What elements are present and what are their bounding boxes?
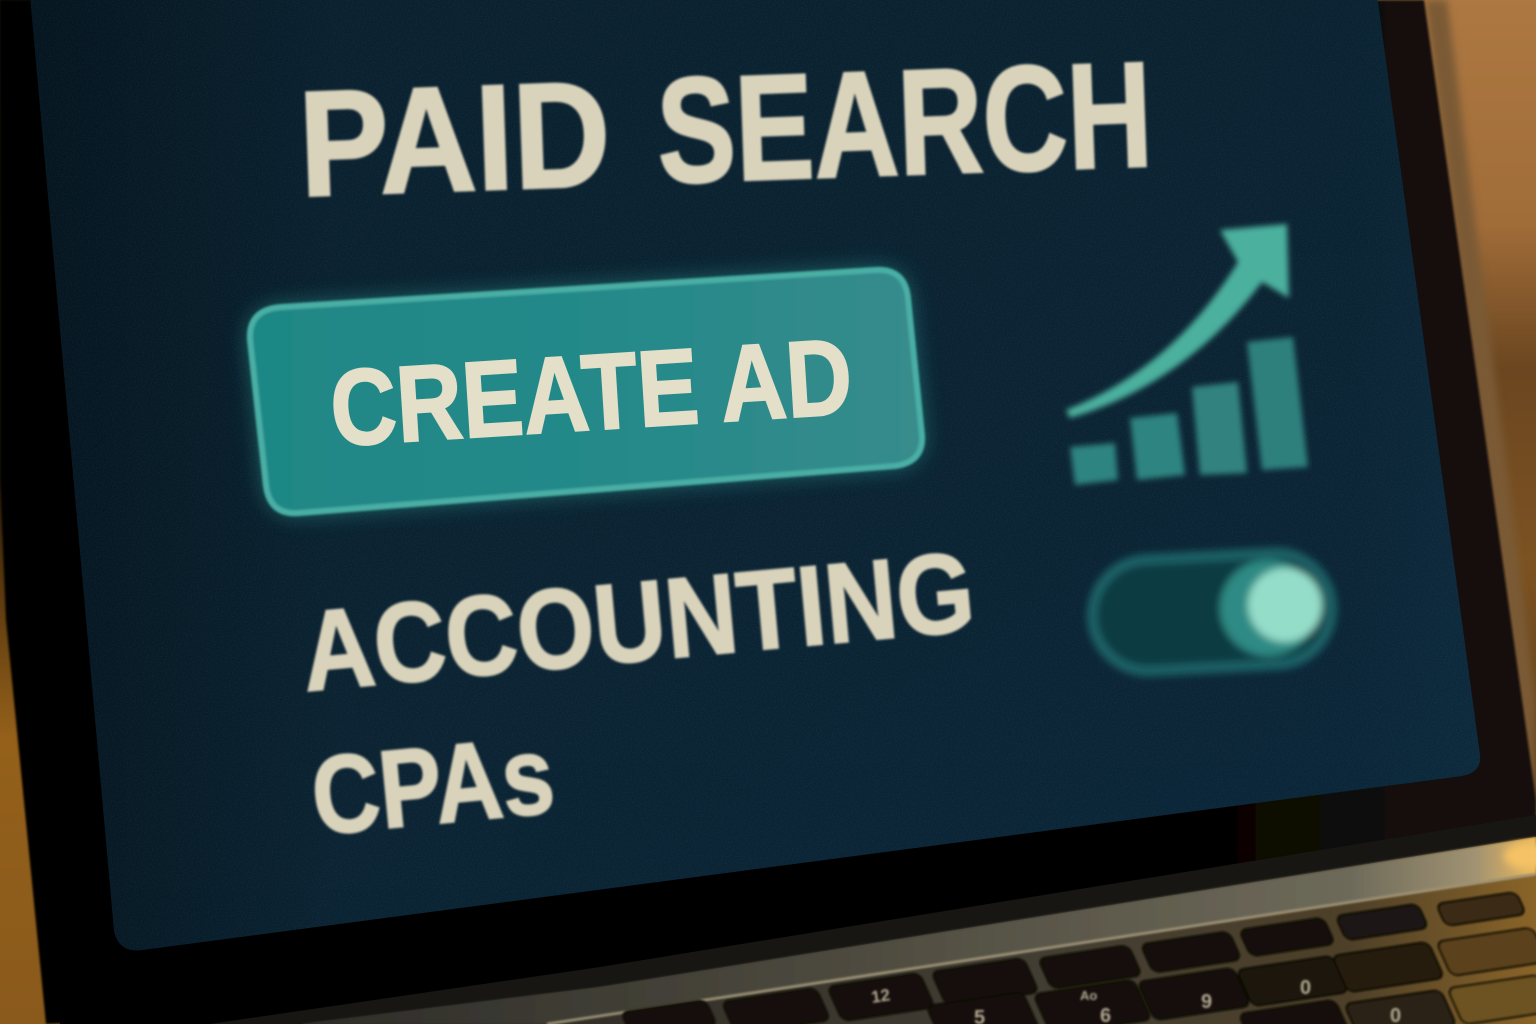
hinge silver strip: [300, 837, 1536, 1024]
button body: [250, 270, 922, 513]
bar 1: [1070, 443, 1118, 485]
key legends: 0: [1300, 977, 1311, 999]
label: CPAs: CPAs: [307, 713, 559, 859]
keyboard keys: [621, 892, 1536, 1024]
bar 2: [1130, 413, 1185, 480]
heading: PAID SEARCH: [296, 30, 1155, 228]
button label: CREATE AD: [327, 315, 855, 469]
key legends: 9: [1201, 991, 1212, 1013]
heading: PAID SEARCH: SEARCH: [654, 30, 1155, 215]
rising arrow: [1066, 224, 1289, 418]
key legends: [870, 977, 1401, 1024]
heading: PAID SEARCH: PAID: [296, 49, 613, 228]
background: warm wood right side: [1300, 0, 1536, 1024]
label: ACCOUNTING: ACCOUNTING: [297, 528, 979, 715]
hinge lower highlight: [547, 874, 1536, 1024]
toggle knob: [1248, 568, 1322, 642]
toggle track: [1089, 550, 1335, 674]
laptop lid edge highlight: [1425, 0, 1536, 860]
button glow: [250, 270, 922, 513]
background: warm wood left side: [0, 0, 60, 1024]
bar 3: [1192, 382, 1247, 475]
key legends: Ao: [1080, 988, 1097, 1003]
corner glare: [1504, 843, 1536, 869]
hinge dark strip: [210, 815, 1536, 1024]
toggle switch: [1089, 550, 1335, 674]
keyboard deck: [210, 815, 1536, 1024]
bar 4: [1247, 337, 1308, 470]
toggle halo: [1220, 560, 1316, 656]
key legends: 12: [870, 986, 891, 1007]
growth chart icon: [1066, 224, 1308, 485]
button: CREATE AD: [250, 270, 922, 513]
